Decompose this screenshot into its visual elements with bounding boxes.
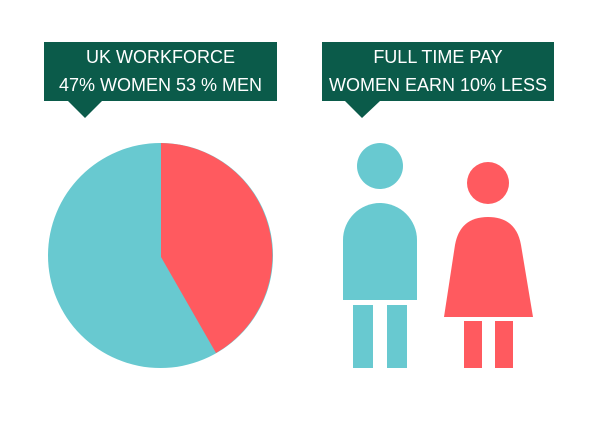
icon: woman [444, 162, 533, 368]
pie chart [48, 143, 273, 368]
callout: UK workforce: UK WORKFORCE [86, 47, 235, 67]
icon: man [343, 143, 417, 368]
callout: UK workforce: 47% WOMEN 53 % MEN [59, 75, 262, 95]
callout: full time pay: FULL TIME PAY [373, 47, 503, 67]
callout: full time pay [322, 42, 554, 118]
callout: UK workforce [44, 42, 277, 118]
callout: full time pay: WOMEN EARN 10% LESS [329, 75, 547, 95]
